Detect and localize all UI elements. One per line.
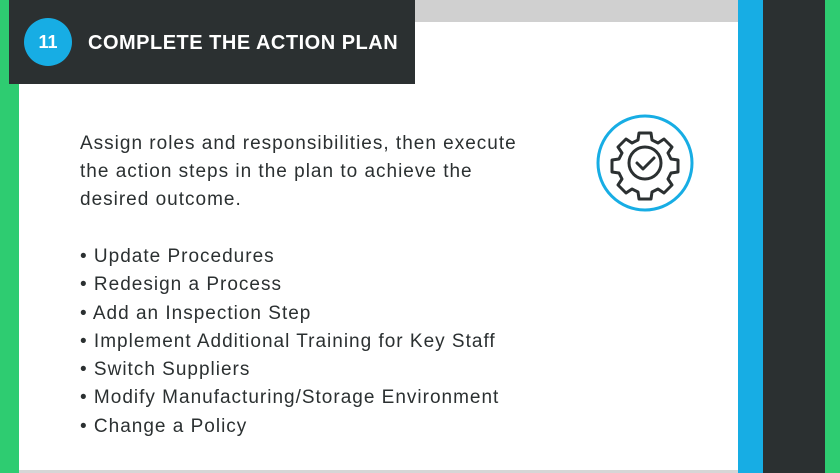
top gray bar bbox=[410, 0, 738, 22]
bullet list bbox=[80, 246, 499, 437]
bullet list: • Add an Inspection Step bbox=[80, 303, 311, 324]
step number badge: 11 bbox=[38, 32, 58, 52]
bullet list: • Implement Additional Training for Key Staff bbox=[80, 331, 496, 352]
step number badge bbox=[24, 18, 72, 66]
bullet list: • Update Procedures bbox=[80, 246, 275, 267]
intro paragraph: Assign roles and responsibilities, then execute the action steps in the plan to achieve the desired outcome. bbox=[80, 133, 517, 210]
left green strip bbox=[0, 0, 19, 473]
bullet list: • Modify Manufacturing/Storage Environment bbox=[80, 387, 499, 408]
bottom gray line bbox=[19, 470, 738, 473]
header bar bbox=[9, 0, 415, 84]
bullet list: • Change a Policy bbox=[80, 416, 247, 437]
title: COMPLETE THE ACTION PLAN bbox=[88, 32, 398, 54]
right blue strip bbox=[738, 0, 763, 473]
icon: gear with check bbox=[596, 114, 694, 212]
bullet list: • Switch Suppliers bbox=[80, 359, 250, 380]
bullet list: • Redesign a Process bbox=[80, 274, 282, 295]
right dark strip bbox=[763, 0, 825, 473]
right green strip bbox=[825, 0, 840, 473]
